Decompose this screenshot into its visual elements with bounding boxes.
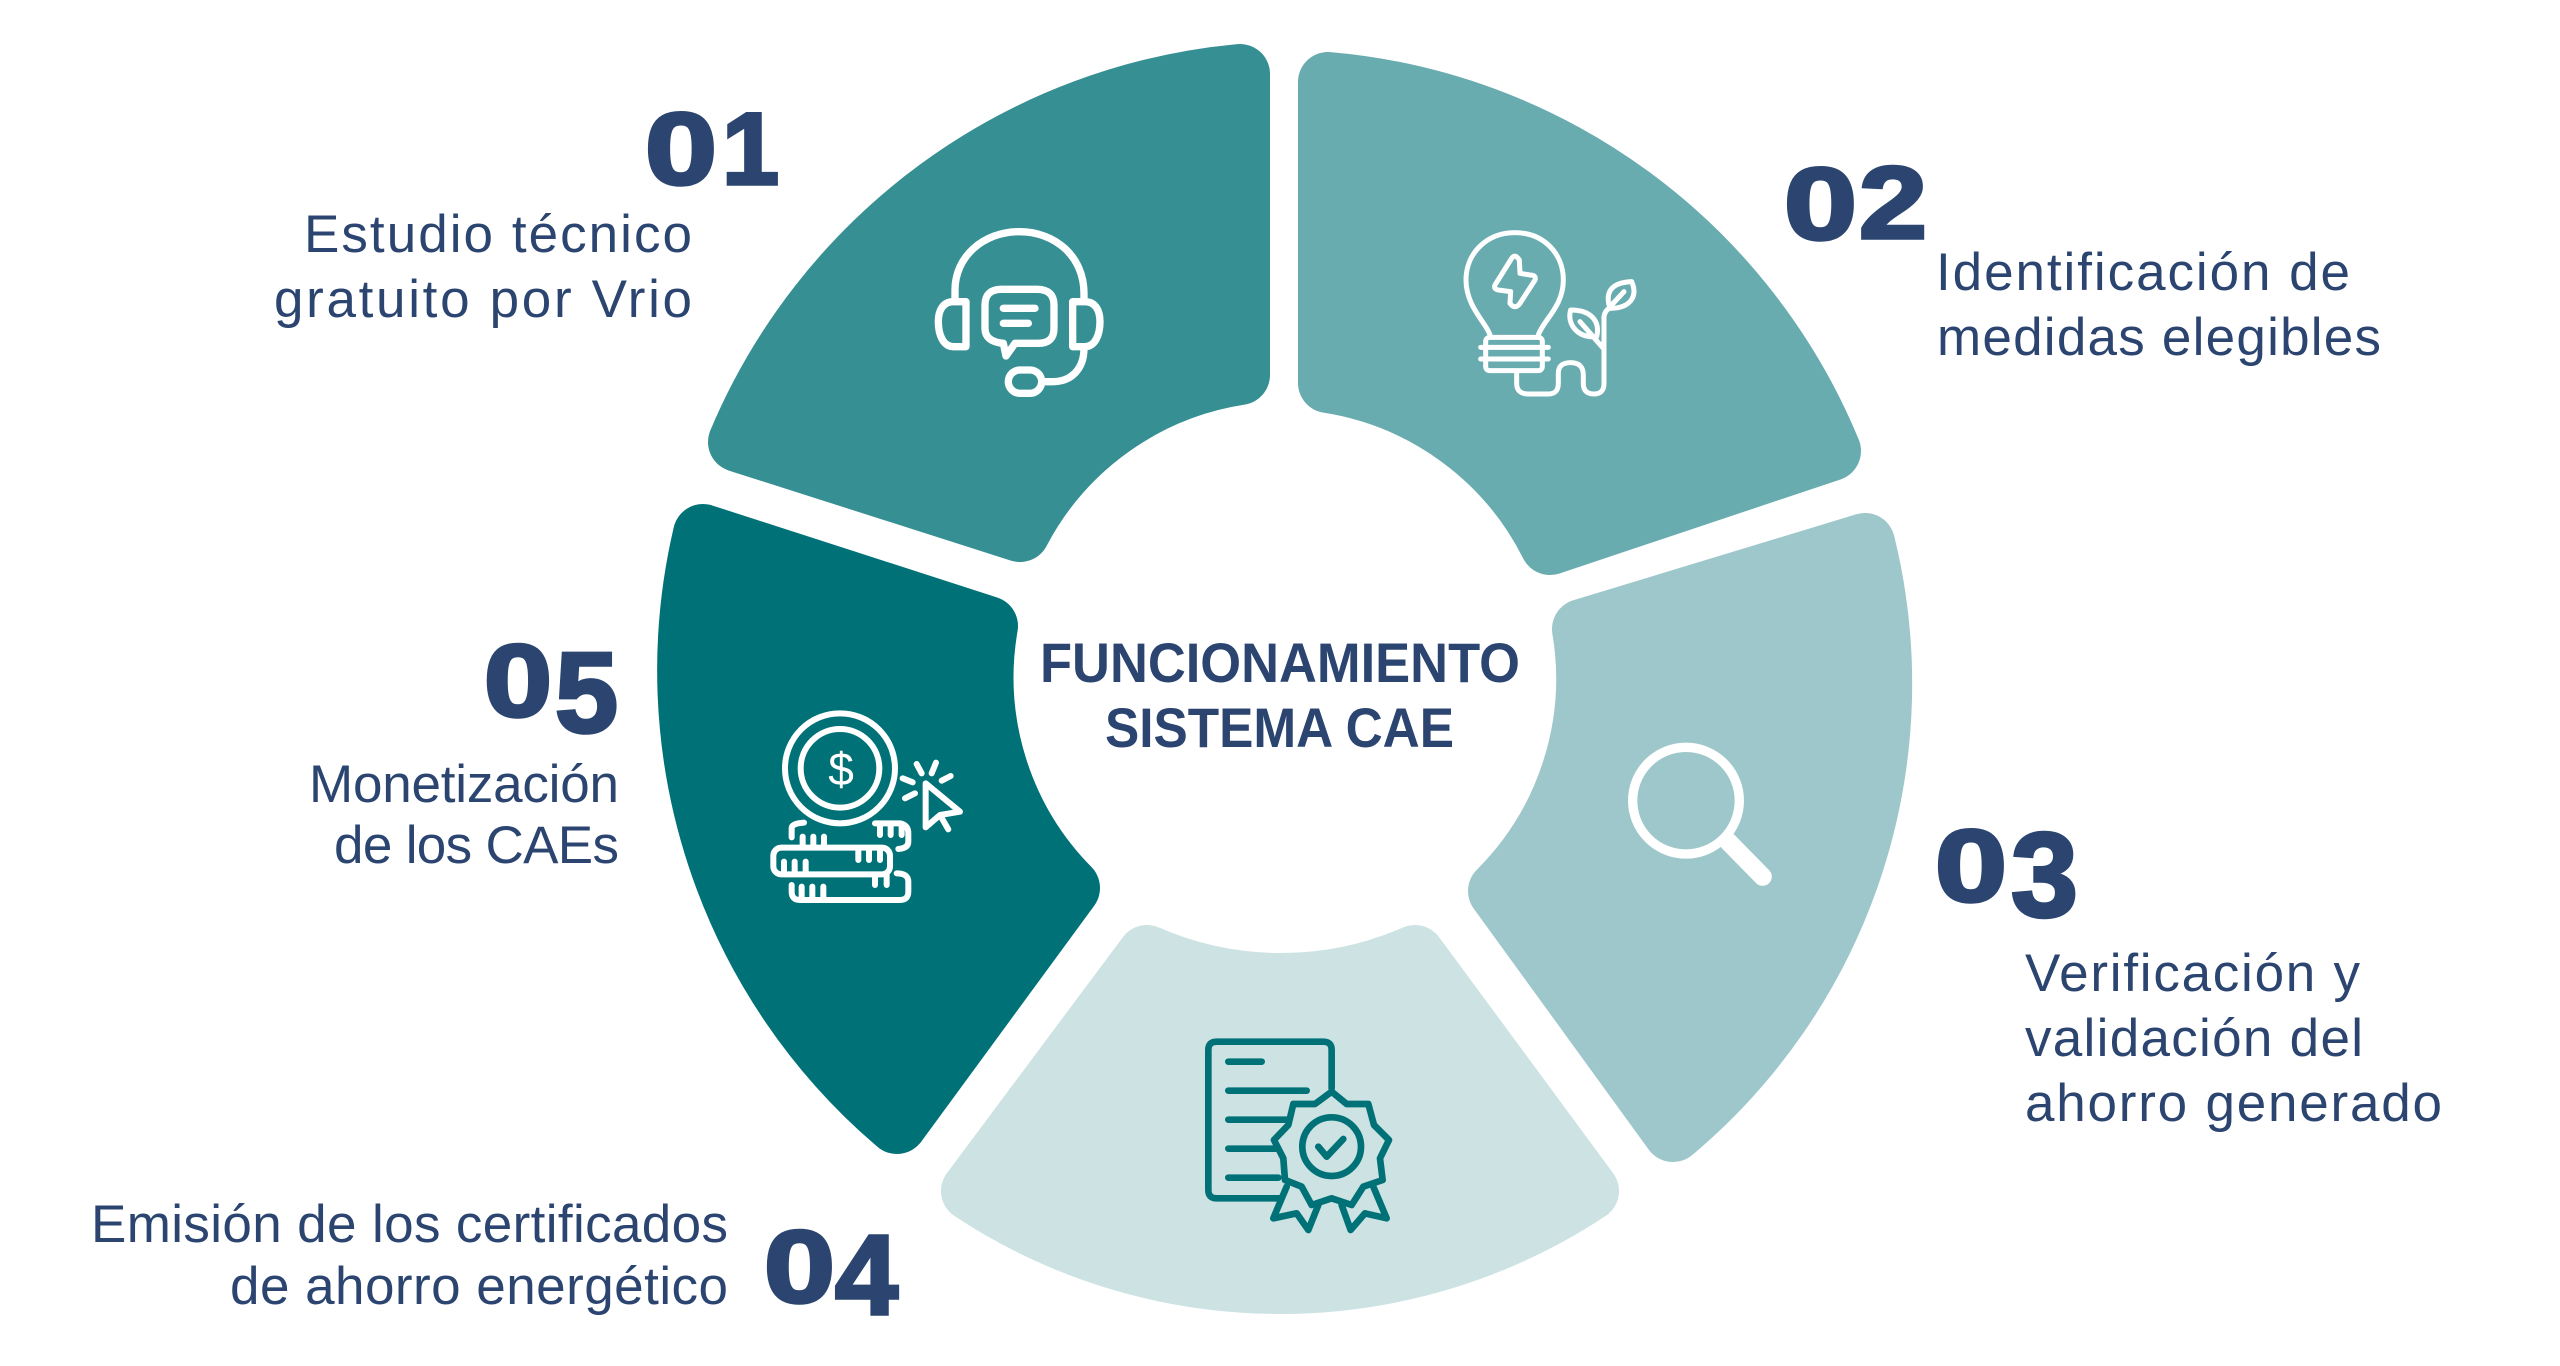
panel: step 04 segment	[971, 955, 1589, 1284]
panel: step 05 segment	[687, 534, 1070, 1124]
step 02 label	[1936, 243, 2381, 367]
step 01 label: Estudio técnico	[304, 205, 692, 264]
segment 05 shape	[687, 534, 1070, 1124]
step 05 number	[484, 624, 618, 757]
step 03 label: ahorro generado	[2025, 1074, 2442, 1133]
segment 01 shape	[738, 74, 1240, 532]
step 04 label	[91, 1195, 728, 1316]
step 01 number: 0	[645, 92, 717, 206]
step 05 label: Monetización	[309, 755, 619, 814]
step 02 label: medidas elegibles	[1937, 308, 2381, 367]
panel: step 03 segment	[1498, 543, 1882, 1132]
step 03 label: validación del	[2025, 1009, 2363, 1068]
step 01 label	[274, 205, 692, 329]
step 04 label: de ahorro energético	[230, 1257, 728, 1316]
segment 04 shape	[971, 955, 1589, 1284]
step 04 number: 0	[764, 1210, 835, 1324]
step 04 number	[764, 1210, 898, 1338]
center title: FUNCIONAMIENTO	[1040, 631, 1520, 694]
step 05 label: de los CAEs	[334, 816, 619, 875]
center title	[1040, 631, 1520, 759]
icon: dollar sign: $	[828, 743, 854, 795]
step 05 label	[309, 755, 619, 875]
step 03 number	[1935, 808, 2078, 942]
step 05 number: 5	[555, 630, 618, 757]
segment 02 shape	[1328, 82, 1831, 545]
step 02 label: Identificación de	[1936, 243, 2350, 302]
icon: light bulb with plant	[1466, 233, 1634, 394]
panel: step 01 segment	[738, 74, 1240, 532]
step 02 number: 2	[1859, 146, 1927, 260]
icon: headset with chat bubble	[938, 232, 1100, 393]
segment 03 shape	[1498, 543, 1882, 1132]
step 03 label	[2025, 944, 2442, 1133]
step 05 number: 0	[484, 624, 552, 738]
icon: coins with dollar and cursor	[773, 713, 960, 900]
icon: document with certificate seal	[1208, 1042, 1389, 1230]
step 02 number: 0	[1784, 147, 1857, 261]
step 02 number	[1784, 146, 1927, 261]
step 03 label: Verificación y	[2025, 944, 2360, 1003]
icon: magnifying glass	[1633, 747, 1763, 877]
step 03 number: 0	[1935, 809, 2007, 923]
step 04 number: 4	[835, 1212, 898, 1338]
step 01 label: gratuito por Vrio	[274, 270, 692, 329]
step 01 number: 1	[722, 92, 779, 206]
center title: SISTEMA CAE	[1105, 696, 1454, 759]
step 04 label: Emisión de los certificados	[91, 1195, 728, 1254]
step 03 number: 3	[2011, 808, 2078, 942]
step 01 number	[645, 92, 779, 206]
panel: step 02 segment	[1328, 82, 1831, 545]
